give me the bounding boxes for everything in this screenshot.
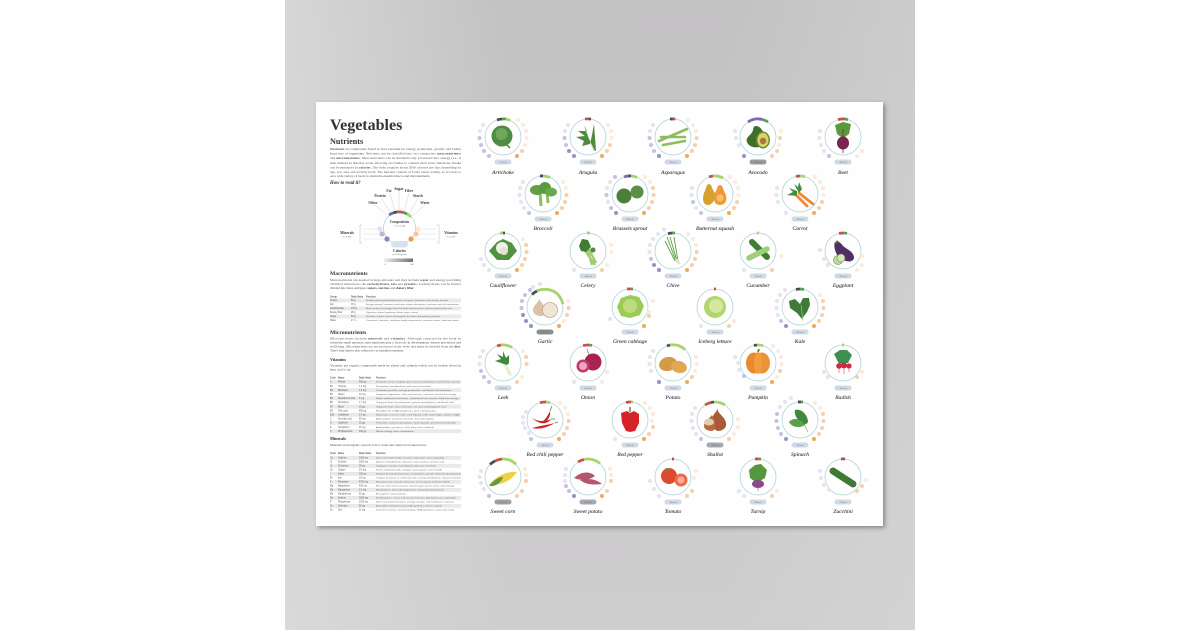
- table: vitamins: Cobalamin: [338, 414, 350, 416]
- panel: butternut squash: Butternut squash: [696, 226, 734, 232]
- table: vitamins: Promotes growth, energy production, red blood cell formation: [376, 389, 452, 392]
- panel: left text column: [329, 117, 462, 512]
- panel: beet: [820, 119, 862, 176]
- table: minerals: Bone and tooth health, muscle contraction, nerve signaling: [376, 457, 445, 460]
- table: minerals: P: [330, 502, 332, 504]
- table: macronutrients: Digestion, bowel regularity, blood sugar control: [366, 311, 419, 314]
- table: minerals: Chromium: [338, 465, 349, 468]
- chart: how to read diagram: % of DV: [343, 236, 352, 238]
- table: minerals: Bone and tooth formation, energy storage, cell membrane structure: [376, 501, 455, 504]
- table: minerals: Forms red blood cells, collagen and supports nerve health: [376, 469, 443, 472]
- table: minerals: Iodine: [338, 474, 345, 476]
- table: vitamins: Pantothenic acid: [338, 397, 356, 400]
- table: minerals: Zinc: [338, 510, 343, 512]
- table: minerals: Se: [330, 506, 334, 508]
- chart: how to read diagram: Minerals: [340, 231, 354, 235]
- panel: iceberg lettuce: Iceberg lettuce: [697, 339, 732, 345]
- table: vitamins: C: [330, 419, 332, 421]
- table: minerals: 0.9 mg: [359, 470, 367, 472]
- table: vitamins: E: [330, 427, 332, 429]
- panel: green cabbage: 25 kcal: [627, 332, 634, 334]
- panel: onion: 40 kcal: [585, 388, 592, 390]
- table: vitamins: Pyridoxine: [338, 401, 349, 404]
- table: minerals: Molybdenum: [338, 494, 351, 496]
- table: vitamins: B12: [330, 414, 335, 416]
- heading: minerals: Minerals: [330, 436, 346, 441]
- panel: radish: 16 kcal: [840, 388, 847, 390]
- table: vitamins: Promotes calcium absorption, bone growth and immune function: [376, 422, 457, 425]
- table: minerals: Sodium: [338, 498, 346, 500]
- panel: shallot: [692, 402, 738, 458]
- chart: how to read diagram: % of DV: [447, 236, 456, 238]
- panel: cucumber: [740, 233, 782, 289]
- table: macronutrients: Dietary fiber: [330, 311, 343, 314]
- chart: how to read diagram: Water: [420, 201, 430, 205]
- panel: pumpkin: 26 kcal: [755, 388, 762, 390]
- panel: spinach: 23 kcal: [797, 445, 804, 447]
- table: minerals: Selenium: [338, 506, 348, 508]
- table: vitamins: 400 µg: [359, 410, 367, 412]
- chart: how to read diagram: 300: [410, 263, 415, 266]
- table: minerals: 35 µg: [359, 466, 366, 468]
- table: vitamins: Calciferol: [338, 422, 348, 425]
- panel: potato: Potato: [665, 395, 681, 401]
- table: minerals: Mn: [330, 490, 334, 492]
- background wall: [285, 0, 915, 630]
- table: minerals: Antioxidant, thyroid function, DNA synthesis, immune system: [376, 505, 442, 508]
- panel: artichoke: 47 kcal: [500, 162, 507, 164]
- table: minerals: Fluid balance, nerve and muscle function, blood pressure regulation: [376, 497, 457, 500]
- table: vitamins: Supports hair, skin and nails, fat and carbohydrate use: [376, 405, 447, 408]
- panel: beet: Beet: [838, 170, 848, 176]
- table: vitamins: 20 µg: [359, 423, 366, 425]
- table: minerals: Mg: [330, 486, 334, 488]
- chart: how to read diagram: Other: [368, 201, 378, 205]
- table: macronutrients: Fat: [330, 303, 334, 306]
- text block: nutrients intro: functions of organisms. Nutrients can be classified into two categories: macronutrients: [330, 152, 462, 156]
- panel: celery: 16 kcal: [585, 276, 592, 278]
- panel: iceberg lettuce: [697, 289, 734, 345]
- panel: spinach: [776, 398, 824, 458]
- panel: eggplant: Eggplant: [832, 283, 854, 289]
- table: minerals: Iron: [338, 477, 343, 480]
- panel: butternut squash: [692, 176, 739, 232]
- panel: celery: [570, 233, 612, 289]
- title: Vegetables: [330, 117, 402, 134]
- heading: how to read it: How to read it?: [329, 181, 361, 186]
- panel: onion: Onion: [581, 395, 595, 401]
- text block: nutrients intro: then utilized in muscles work, allowing our bodies to conduct their basic functions. Intake: [330, 161, 462, 166]
- panel: turnip: Turnip: [751, 509, 766, 515]
- table: minerals: 420 mg: [359, 486, 367, 488]
- table: minerals: Mo: [330, 494, 334, 496]
- panel: kale: 49 kcal: [797, 332, 804, 334]
- table: vitamins: B3: [330, 394, 334, 396]
- table: macronutrients: Function: [366, 296, 376, 298]
- table: minerals: Name: [338, 453, 345, 455]
- panel: leek: Leek: [497, 395, 509, 401]
- table: vitamins: Antioxidant, immune function, iron absorption: [376, 418, 435, 421]
- chart: how to read diagram: Calories: [393, 249, 406, 253]
- panel: arugula: 25 kcal: [585, 162, 592, 164]
- table: minerals: 2.3 mg: [359, 490, 367, 492]
- panel: sweet potato: Sweet potato: [574, 509, 603, 515]
- panel: garlic: 149 kcal: [541, 332, 550, 334]
- table: vitamins: 1.2 mg: [359, 386, 367, 388]
- table: vitamins: [330, 376, 461, 433]
- table: vitamins: K: [330, 431, 332, 433]
- table: minerals: Ca: [330, 458, 334, 460]
- table: minerals: Supports insulin, metabolizes glucose and fats: [376, 465, 437, 468]
- table: vitamins: 900 µg: [359, 382, 367, 384]
- table: vitamins: B1: [330, 386, 334, 388]
- text block: nutrients intro: [330, 147, 462, 178]
- table: macronutrients: Main source of energy, fuels the brain and muscles, spares protein from use: [366, 307, 453, 310]
- panel: garlic: [522, 284, 569, 345]
- table: minerals: 2300 mg: [359, 498, 369, 500]
- panel: sweet corn: [480, 459, 526, 515]
- table: macronutrients: Water: [330, 319, 336, 322]
- panel: arugula: Arugula: [578, 170, 597, 176]
- table: minerals: Daily Value: [359, 453, 372, 455]
- text block: macronutrients intro: divided into three subtypes: sugars, starches and dietary fiber.: [330, 286, 415, 290]
- table: minerals: 1300 mg: [359, 458, 369, 460]
- panel: carrot: [776, 176, 824, 232]
- panel: potato: 77 kcal: [670, 388, 677, 390]
- table: minerals: Metabolism, bone development, antioxidant protection: [376, 489, 445, 492]
- table: minerals: Copper: [338, 469, 346, 472]
- table: minerals: Cr: [330, 465, 333, 468]
- table: macronutrients: Transports nutrients, regulates body temperature, removes waste, lubricates joints: [366, 319, 460, 322]
- table: vitamins: 2.4 µg: [359, 414, 366, 416]
- table: minerals: Code: [330, 453, 336, 455]
- panel: tomato: Tomato: [665, 509, 681, 515]
- table: macronutrients: 50 g: [351, 316, 356, 318]
- text block: vitamins intro: Vitamins are organic compounds made by plants and animals which can be broken down by: [330, 364, 461, 368]
- panel: red pepper: [612, 402, 653, 458]
- table: vitamins: Needed for DNA synthesis and cell division: [376, 409, 437, 412]
- table: vitamins: B6: [330, 402, 334, 404]
- table: vitamins: 90 mg: [359, 419, 366, 421]
- table: minerals: 1250 mg: [359, 502, 369, 504]
- panel: spinach: Spinach: [791, 452, 809, 458]
- panel: green cabbage: Green cabbage: [613, 339, 648, 345]
- panel: asparagus: 20 kcal: [670, 162, 677, 164]
- table: vitamins: Code: [330, 378, 336, 380]
- panel: sweet corn: 86 kcal: [500, 502, 507, 504]
- table: vitamins: Biotin: [338, 405, 344, 408]
- chart: how to read diagram: 0: [384, 263, 386, 266]
- panel: kale: Kale: [794, 339, 806, 345]
- table: vitamins: Promotes vision, healthy skin, mucous membranes and immune system: [376, 381, 460, 384]
- poster sheet: [316, 102, 885, 528]
- panel: pumpkin: Pumpkin: [747, 395, 768, 401]
- text block: nutrients intro: and micronutrients. Macronutrients can be metabolically processed into energy (i.e. is: [330, 156, 462, 160]
- table: vitamins: Name: [338, 378, 345, 380]
- table: minerals: Fe: [330, 478, 333, 480]
- text block: macronutrients intro: chemical substances: the carbohydrates, fats and proteins. Carbohydrates can be further: [330, 282, 462, 286]
- panel: avocado: Avocado: [747, 170, 768, 176]
- panel: zucchini: 17 kcal: [840, 502, 847, 504]
- text block: macronutrients intro: [330, 278, 462, 290]
- panel: potato: [650, 345, 697, 401]
- chart: how to read diagram: Fiber: [405, 189, 414, 193]
- table: vitamins: Antioxidant, protects cells from free radicals: [376, 426, 435, 429]
- table: macronutrients: [330, 296, 461, 322]
- panel: eggplant: 25 kcal: [840, 276, 847, 278]
- table: minerals: Needed for thyroid hormones, metabolism, growth and brain development: [376, 473, 461, 476]
- panel: broccoli: 34 kcal: [540, 219, 547, 221]
- table: vitamins: Retinol: [338, 381, 346, 384]
- panel: broccoli: Broccoli: [533, 226, 553, 232]
- table: macronutrients: Sugar: [330, 315, 336, 318]
- panel: radish: Radish: [834, 395, 851, 401]
- table: vitamins: Blood clotting, bone metabolism: [376, 430, 414, 433]
- chart: how to read diagram: Starch: [413, 194, 423, 198]
- table: macronutrients: 2.7 L: [351, 320, 357, 322]
- table: minerals: Balance of bodily fluids, digestion, helps produce stomach acid: [376, 461, 445, 464]
- table: vitamins: 120 µg: [359, 431, 367, 433]
- table: macronutrients: Protein: [330, 299, 338, 302]
- heading: micronutrients: Micronutrients: [330, 330, 367, 336]
- text block: micronutrients intro: relatively small amounts, micronutrients play a vital role in development, disease prevention and: [330, 340, 461, 346]
- chart: how to read diagram: Vitamins: [444, 231, 459, 235]
- panel: red chili pepper: Red chili pepper: [526, 452, 564, 458]
- panel: chive: 30 kcal: [670, 276, 677, 278]
- panel: avocado: 160 kcal: [754, 162, 763, 164]
- table: minerals: Enzyme activation: [376, 493, 407, 496]
- text block: vitamins intro: [330, 364, 461, 372]
- table: vitamins: 1.7 mg: [359, 402, 367, 404]
- chart: how to read diagram: Sugar: [394, 187, 404, 191]
- text block: nutrients intro: can be measured in calories. The body requires about 2000 calories per day, depending on: [330, 165, 461, 170]
- panel: sweet potato: 86 kcal: [585, 502, 592, 504]
- table: minerals: 11 mg: [359, 510, 366, 512]
- table: macronutrients: Building and repairing body tissues, enzymes, hormones and immune function: [366, 299, 449, 302]
- panel: brussels sprout: 43 kcal: [627, 219, 634, 221]
- table: minerals: Function: [376, 452, 386, 455]
- text block: macronutrients intro: Macronutrients are needed in large amounts and they include water and energy-providing: [330, 278, 461, 282]
- table: minerals: Na: [330, 498, 334, 500]
- panel: tomato: 18 kcal: [670, 502, 677, 504]
- table: minerals: Potassium: [338, 481, 349, 484]
- panel: red pepper: Red pepper: [616, 452, 644, 458]
- heading: nutrients: Nutrients: [330, 137, 363, 146]
- panel: tomato: [650, 459, 696, 515]
- panel: zucchini: Zucchini: [833, 509, 853, 515]
- panel: cauliflower: Cauliflower: [490, 282, 517, 289]
- table: minerals: Zn: [330, 510, 333, 512]
- chart: how to read diagram: Composition: [390, 220, 409, 224]
- table: macronutrients: 275 g: [351, 308, 357, 310]
- heading: vitamins: Vitamins: [330, 357, 347, 362]
- text block: vitamins intro: heat, acid or air.: [330, 368, 351, 372]
- table: macronutrients: Provides a quick source of energy for the brain and working muscles: [366, 315, 441, 318]
- table: vitamins: Supports digestion, skin and nerves, converts food into energy: [376, 393, 457, 396]
- table: minerals: Cl: [330, 462, 333, 464]
- table: macronutrients: Carbohydrate: [330, 307, 345, 310]
- panel: carrot: Carrot: [792, 226, 808, 232]
- panel: broccoli: [520, 176, 567, 232]
- table: macronutrients: 28 g: [351, 312, 356, 314]
- table: vitamins: Promotes metabolism and nerve function: [376, 385, 432, 388]
- panel: turnip: 28 kcal: [755, 502, 762, 504]
- panel: brussels sprout: Brussels sprout: [613, 226, 648, 232]
- panel: beet: 43 kcal: [840, 162, 847, 164]
- table: vitamins: Thiamin: [338, 386, 347, 388]
- table: macronutrients: Group: [330, 296, 337, 298]
- text block: nutrients intro: age, sex, size and activity level. The nutrient content of foods varies widely, so it's best to: [330, 170, 461, 175]
- table: vitamins: Supports brain development, protein metabolism, red blood cells: [376, 401, 455, 404]
- panel: arugula: [564, 119, 612, 176]
- table: macronutrients: 78 g: [351, 304, 356, 306]
- heading: macronutrients: Macronutrients: [330, 271, 368, 277]
- panel: shallot: Shallot: [707, 452, 723, 458]
- table: vitamins: Folic acid: [338, 410, 348, 412]
- table: vitamins: Ascorbic acid: [338, 418, 352, 421]
- table: vitamins: Maintains nerve cells, red blood cells and helps make DNA: [376, 414, 460, 416]
- panel: onion: [570, 345, 607, 401]
- panel: cauliflower: [481, 233, 527, 289]
- panel: artichoke: Artichoke: [491, 170, 514, 176]
- table: vitamins: Helps synthesize hormones, cholesterol and converts food into energy: [376, 397, 459, 400]
- panel: sweet potato: [565, 459, 611, 515]
- table: vitamins: 1.3 mg: [359, 390, 367, 392]
- panel: brussels sprout: [606, 176, 654, 232]
- table: vitamins: B9: [330, 410, 334, 412]
- table: minerals: 2300 mg: [359, 462, 369, 464]
- panel: leek: [480, 345, 527, 401]
- table: vitamins: B2: [330, 390, 334, 392]
- table: vitamins: Phylloquinone: [338, 431, 353, 433]
- chart: how to read diagram: % of weight: [394, 224, 406, 228]
- panel: red chili pepper: 40 kcal: [542, 445, 549, 447]
- table: vitamins: Function: [376, 376, 386, 380]
- panel: carrot: 41 kcal: [797, 219, 804, 221]
- panel: chive: [650, 230, 697, 289]
- panel: artichoke: [480, 119, 527, 176]
- table: minerals: [330, 452, 462, 512]
- text block: micronutrients intro: wellbeing. Micronutrients are not produced in the body and must be derived from the diet.: [330, 344, 461, 348]
- table: minerals: Oxygen transport in red blood cells, energy metabolism, immune function: [376, 477, 462, 480]
- panel: radish: [824, 345, 862, 401]
- panel: kale: [776, 289, 824, 345]
- table: vitamins: B7: [330, 406, 334, 408]
- table: minerals: Phosphorus: [338, 501, 351, 504]
- table: minerals: Muscle and nerve function, blood sugar levels, bone and energy: [376, 485, 455, 488]
- table: minerals: Calcium: [338, 458, 346, 460]
- panel: leek: 61 kcal: [500, 388, 507, 390]
- table: vitamins: 5 mg: [359, 398, 365, 400]
- panel: zucchini: [820, 459, 866, 515]
- chart: how to read diagram: per 100 grams: [393, 253, 406, 256]
- panel: pumpkin: [735, 345, 782, 401]
- table: minerals: Magnesium: [338, 486, 350, 488]
- text block: nutrients intro: Nutrients are compounds found in food essential for energy production, growth, and bodily: [330, 147, 461, 152]
- text block: micronutrients intro: [330, 336, 461, 352]
- table: minerals: I: [330, 474, 331, 476]
- panel: red pepper: 31 kcal: [627, 445, 634, 447]
- chart: how to read diagram: Fat: [386, 189, 392, 193]
- table: vitamins: Daily Value: [359, 378, 372, 380]
- table: macronutrients: Daily Value: [351, 296, 364, 298]
- table: minerals: 150 µg: [359, 474, 367, 476]
- panel: cucumber: Cucumber: [746, 283, 770, 289]
- chart: how to read diagram: Protein: [374, 194, 386, 198]
- panel: iceberg lettuce: 14 kcal: [712, 332, 719, 334]
- panel: asparagus: Asparagus: [660, 170, 685, 176]
- panel: shallot: 72 kcal: [712, 445, 719, 447]
- table: vitamins: Niacin: [338, 394, 345, 396]
- panel: turnip: [739, 459, 777, 515]
- table: vitamins: Riboflavin: [338, 390, 349, 392]
- table: minerals: Manganese: [338, 490, 351, 492]
- table: minerals: Chloride: [338, 461, 347, 464]
- panel: avocado: [735, 119, 781, 176]
- table: vitamins: D: [330, 423, 332, 425]
- panel: cucumber: 15 kcal: [755, 276, 762, 278]
- panel: garlic: Garlic: [538, 339, 553, 345]
- text block: micronutrients intro: That's why they're also referred to as essential nutrients.: [330, 348, 404, 352]
- panel: eggplant: [820, 233, 862, 289]
- table: vitamins: 30 µg: [359, 406, 366, 408]
- table: macronutrients: Energy storage, hormone production, vitamin absorption, insulation and cell membranes: [366, 303, 460, 306]
- table: vitamins: 15 mg: [359, 427, 366, 429]
- table: minerals: Blood pressure, muscle contraction, nerve signals and heart rhythm: [376, 481, 450, 484]
- table: vitamins: A: [330, 381, 332, 384]
- text block: micronutrients intro: Micronutrients include minerals and vitamins. Although required by the body in: [330, 336, 461, 340]
- panel: green cabbage: [610, 289, 653, 345]
- panel: red chili pepper: [523, 402, 569, 458]
- table: minerals: Cu: [330, 470, 334, 472]
- table: vitamins: 16 mg: [359, 394, 366, 396]
- table: vitamins: B5: [330, 398, 334, 400]
- chart: how to read diagram: [340, 187, 459, 266]
- panel: chive: Chive: [666, 283, 680, 289]
- table: minerals: 45 µg: [359, 494, 366, 496]
- table: minerals: 4700 mg: [359, 482, 369, 484]
- table: minerals: 55 µg: [359, 506, 366, 508]
- table: minerals: 18 mg: [359, 478, 366, 480]
- table: minerals: Immune function, wound healing, DNA synthesis, taste and smell: [376, 509, 455, 512]
- table: minerals: K: [330, 482, 332, 484]
- panel: asparagus: [650, 119, 697, 176]
- panel: butternut squash: 45 kcal: [712, 219, 719, 221]
- panel: sweet corn: Sweet corn: [491, 509, 516, 515]
- panel: celery: Celery: [581, 283, 596, 289]
- text block: minerals intro: Minerals are inorganic, exist in soil or water and cannot be broken down.: [330, 443, 427, 448]
- panel: cauliflower: 25 kcal: [500, 276, 507, 278]
- table: macronutrients: 50 g: [351, 300, 356, 302]
- table: vitamins: Tocopherol: [338, 426, 350, 429]
- text block: nutrients intro: eat a wide variety of foods to obtain the essential macro and micronutrients.: [330, 174, 430, 178]
